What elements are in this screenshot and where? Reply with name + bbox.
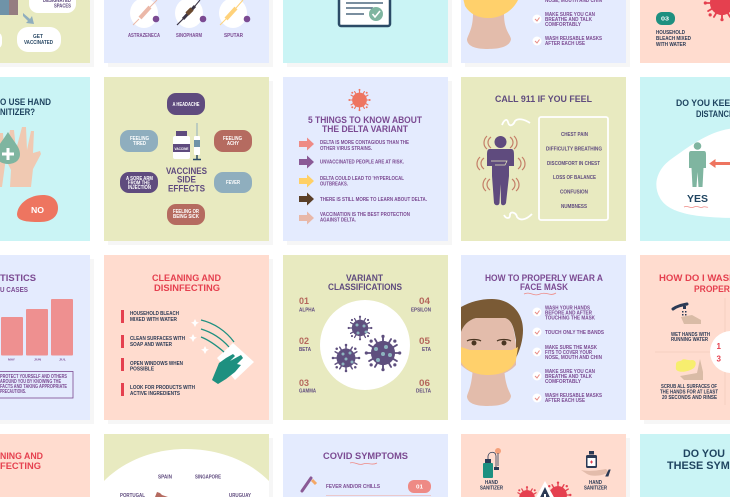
- panel: face mask top: WASH REUSABLE MASKS: [545, 36, 603, 42]
- check list: COMFORTABLY: [545, 379, 582, 385]
- panel: how to wash hands: SCRUB ALL SURFACES OF: [661, 384, 717, 390]
- icon: soapy hands: [676, 359, 703, 380]
- panel: variant classifications: VARIANT: [346, 273, 383, 284]
- panel: cleaning list top: BLEACH MIXED: [656, 36, 691, 42]
- blob: feeling tired: [120, 130, 158, 152]
- blob: feeling achy: FEELING: [223, 136, 242, 142]
- panel: cleaning and disinfecting: ACTIVE INGREDIENTS: [130, 391, 181, 397]
- panel: cleaning and disinfecting: POSSIBLE: [130, 366, 155, 372]
- check list: AFTER EACH USE: [545, 398, 586, 404]
- panel: certificate: [283, 0, 448, 63]
- check list: BREATHE AND TALK: [545, 374, 592, 380]
- panel: call 911: CALL 911 IF YOU FEEL: [495, 94, 592, 105]
- panel: variant classifications: 06: [419, 378, 430, 389]
- panel: how to wash hands: RUNNING WATER: [671, 337, 708, 343]
- panel: how to wash hands: 3: [716, 354, 722, 364]
- panel: statistics: AROUND YOU BY KNOWING THE: [0, 379, 62, 385]
- panel: statistics: JUL: [59, 358, 66, 362]
- check list: TOUCHING THE MASK: [545, 316, 595, 322]
- panel: cleaning list top: 03: [661, 16, 669, 22]
- panel: call 911: LOSS OF BALANCE: [553, 175, 597, 181]
- panel: cleaning and disinfecting: DISINFECTING: [154, 283, 220, 294]
- panel: statistics: MAY: [8, 358, 15, 362]
- panel: keep distance: [640, 77, 730, 241]
- panel: keep distance: YES: [687, 193, 708, 205]
- panel: cleaning and disinfecting: [104, 255, 269, 420]
- panel: cleaning and disinfecting bottom: FECTING: [0, 461, 41, 472]
- panel: cleaning and disinfecting: MIXED WITH WATER: [130, 317, 177, 323]
- panel: variant classifications: 05: [419, 336, 431, 347]
- panel: cleaning and disinfecting bottom: NING AND: [0, 451, 43, 462]
- panel: delta variant: [283, 77, 448, 241]
- panel: get vaccinated: GET: [33, 34, 43, 40]
- panel: variant classifications: EPSILON: [411, 308, 431, 314]
- icon: red viruses: [515, 481, 572, 497]
- panel: face mask top: BREATHE AND TALK: [545, 17, 592, 23]
- panel: variant classifications: GAMMA: [299, 388, 316, 394]
- panel: face mask top: AFTER EACH USE: [545, 41, 586, 47]
- panel: call 911: CONFUSION: [560, 190, 588, 196]
- panel: statistics: PROTECT YOURSELF AND OTHERS: [0, 374, 68, 380]
- blob: fever: [214, 172, 252, 193]
- panel: variant classifications: [283, 255, 448, 420]
- panel: delta variant: OTHER VIRUS STRAINS.: [320, 146, 373, 152]
- panel: variant classifications: 02: [299, 336, 309, 347]
- panel: hand sanitizer: NO: [31, 206, 44, 215]
- panel: statistics: U CASES: [0, 287, 28, 294]
- panel: covid symptoms: 01: [416, 484, 423, 490]
- panel: statistics: [0, 255, 90, 420]
- panel: vaccines side effects: [104, 77, 269, 241]
- panel: variant classifications: DELTA: [416, 388, 431, 394]
- panel: statistics: PRECAUTIONS.: [0, 389, 26, 395]
- panel: variant classifications: CLASSIFICATIONS: [328, 282, 402, 293]
- blob: sore arm: [120, 172, 158, 193]
- panel: do you have these symptoms: [640, 434, 730, 497]
- blob: feeling tired: FEELING: [130, 136, 149, 142]
- panel: cleaning and disinfecting: HOUSEHOLD BLEACH: [130, 311, 179, 317]
- blob: a headache: [167, 93, 205, 115]
- panel: call 911: DIFFICULTY BREATHING: [546, 146, 602, 152]
- check list: WASH YOUR HANDS: [545, 306, 591, 312]
- panel: vaccine brands: SINOPHARM: [176, 33, 202, 39]
- blob: sore arm: INJECTION: [128, 185, 151, 191]
- check list: TOUCH ONLY THE BANDS: [545, 330, 605, 336]
- icon: thermometer: [302, 478, 316, 491]
- panel: delta variant: THE DELTA VARIANT: [322, 124, 408, 135]
- blob: a headache: A HEADACHE: [172, 102, 200, 108]
- icon: person in pain: [477, 136, 525, 205]
- panel: cleaning and disinfecting bottom: [0, 434, 90, 497]
- panel: how to wash hands: 1: [716, 342, 722, 351]
- panel: cleaning and disinfecting: OPEN WINDOWS WHEN: [130, 361, 183, 367]
- panel: cleaning and disinfecting: LOOK FOR PRODUCTS WITH: [130, 385, 195, 391]
- arrow: [710, 160, 730, 167]
- panel: get vaccinated: SPACES: [54, 4, 72, 10]
- icon: virus: [348, 89, 371, 111]
- icon: figure: [689, 142, 706, 187]
- panel: statistics: TISTICS: [0, 273, 36, 284]
- panel: variant classifications: BETA: [299, 347, 311, 353]
- panel: vaccine brands: [104, 0, 269, 63]
- check list: WASH REUSABLE MASKS: [545, 393, 603, 399]
- panel: delta variant: VACCINATION IS THE BEST PROTECTION: [320, 212, 410, 218]
- blob: feeling or being sick: [167, 204, 205, 225]
- icon: red virus: [704, 0, 730, 21]
- panel: how to wear a face mask: HOW TO PROPERLY WEAR A: [485, 273, 603, 284]
- icon: face with mask: [461, 299, 523, 406]
- panel: delta variant: THERE IS STILL MORE TO LEARN ABOUT DELTA.: [320, 197, 428, 203]
- panel: get vaccinated: VACCINATED: [24, 40, 53, 46]
- blob: feeling tired: TIRED: [133, 141, 146, 147]
- panel: how to wash hands: 20 SECONDS AND RINSE: [662, 395, 718, 401]
- check list: NOSE, MOUTH AND CHIN: [545, 355, 602, 361]
- panel: face mask top: [461, 0, 626, 63]
- panel: hand sanitizer: O USE HAND: [0, 97, 51, 108]
- panel: cleaning list top: [640, 0, 730, 63]
- icon: virus cluster: [332, 316, 401, 372]
- check list: MAKE SURE YOU CAN: [545, 369, 595, 375]
- icon: vaccine bottle: [173, 131, 190, 159]
- panel: how to wash hands: WET HANDS WITH: [671, 332, 710, 338]
- panel: call 911: NUMBNESS: [561, 204, 588, 210]
- icon: wiping hand: [189, 319, 254, 384]
- blob: feeling achy: ACHY: [227, 141, 240, 147]
- panel: how to wear a face mask: [461, 255, 626, 420]
- panel: cleaning and disinfecting: SOAP AND WATER: [130, 342, 172, 348]
- panel: countries map: SPAIN: [158, 474, 172, 480]
- panel: cleaning list top: WITH WATER: [656, 42, 686, 48]
- blob: fever: FEVER: [226, 180, 240, 186]
- check list: FITS TO COVER YOUR: [545, 350, 592, 356]
- icon: sanitizer pump: [483, 448, 501, 478]
- panel: how to wear a face mask: FACE MASK: [520, 282, 568, 293]
- blob: sore arm: FROM THE: [128, 180, 151, 186]
- blob: feeling or being sick: FEELING OR: [173, 209, 199, 215]
- panel: statistics: FACTS AND TAKING APPROPRIATE: [0, 384, 68, 390]
- panel: variant classifications: 04: [419, 296, 431, 307]
- panel: hand sanitizer warning: SANITIZER: [480, 486, 503, 492]
- icon: sanitizer bottle and hand: [581, 451, 610, 476]
- panel: vaccines side effects: SIDE: [177, 174, 196, 186]
- panel: vaccine brands: SPUTAR: [224, 33, 243, 39]
- panel: variant classifications: 01: [299, 296, 310, 307]
- panel: variant classifications: ETA: [422, 347, 431, 353]
- blob: feeling achy: [214, 130, 252, 152]
- panel: call 911: CHEST PAIN: [561, 132, 588, 138]
- panel: cleaning list top: HOUSEHOLD: [656, 30, 685, 36]
- panel: hand sanitizer warning: [461, 434, 626, 497]
- icon: warning triangle: [529, 481, 561, 497]
- panel: call 911: [461, 77, 626, 241]
- panel: get vaccinated: [0, 0, 90, 63]
- check list: BEFORE AND AFTER: [545, 310, 592, 316]
- panel: cleaning and disinfecting: CLEANING AND: [152, 273, 221, 284]
- bar chart: [1, 299, 73, 356]
- panel: delta variant: AGAINST DELTA.: [320, 218, 357, 224]
- check list: [532, 306, 605, 404]
- panel: vaccines side effects: EFFECTS: [168, 184, 205, 194]
- panel: how to wash hands: [640, 255, 730, 420]
- panel: covid symptoms: COVID SYMPTOMS: [323, 451, 408, 462]
- blob: feeling or being sick: BEING SICK: [173, 214, 199, 220]
- panel: delta variant: OUTBREAKS.: [320, 182, 349, 188]
- panel: delta variant: DELTA COULD LEAD TO 'HYPERLOCAL: [320, 176, 404, 182]
- panel: vaccines side effects: VACCINES: [166, 166, 207, 177]
- panel: how to wash hands: THE HANDS FOR AT LEAST: [660, 390, 718, 396]
- panel: countries map: [104, 434, 269, 497]
- panel: covid symptoms: [283, 434, 448, 497]
- check list: MAKE SURE THE MASK: [545, 345, 597, 351]
- panel: hand sanitizer warning: HAND: [485, 480, 498, 486]
- panel: hand sanitizer warning: SANITIZER: [584, 486, 607, 492]
- panel: hand sanitizer: NITIZER?: [0, 107, 35, 118]
- panel: cleaning and disinfecting: CLEAN SURFACES WITH: [130, 336, 185, 342]
- panel: delta variant: 5 THINGS TO KNOW ABOUT: [308, 115, 422, 126]
- icon: syringe: [193, 123, 201, 160]
- panel: delta variant: DELTA IS MORE CONTAGIOUS THAN THE: [320, 140, 410, 146]
- panel: covid symptoms: FEVER AND/OR CHILLS: [326, 484, 381, 490]
- panel: statistics: JUN: [34, 358, 41, 362]
- icon: vaccine bottle: VACCINE: [174, 147, 189, 151]
- panel: vaccine brands: ASTRAZENECA: [128, 33, 160, 39]
- panel: do you have these symptoms: DO YOU: [683, 448, 725, 460]
- panel: delta variant: UNVACCINATED PEOPLE ARE AT RISK.: [320, 160, 405, 166]
- panel: variant classifications: ALPHA: [299, 308, 315, 314]
- panel: call 911: DISCOMFORT IN CHEST: [547, 161, 600, 167]
- panel: hand sanitizer: [0, 77, 90, 241]
- blob: sore arm: A SORE ARM: [126, 176, 153, 182]
- panel: face mask top: MAKE SURE YOU CAN: [545, 12, 595, 18]
- panel: hand sanitizer warning: HAND: [589, 480, 602, 486]
- panel: variant classifications: 03: [299, 378, 309, 389]
- panel: face mask top: COMFORTABLY: [545, 22, 582, 28]
- panel: countries map: SINGAPORE: [195, 474, 222, 480]
- icon: faucet: [673, 304, 701, 324]
